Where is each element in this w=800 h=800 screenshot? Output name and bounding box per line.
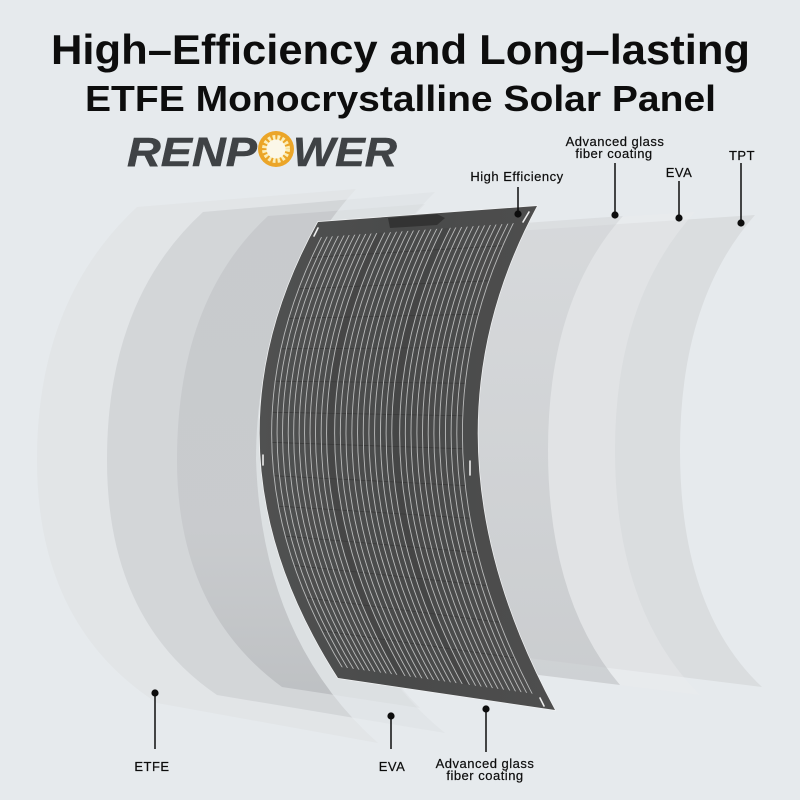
callout: TPT: TPT bbox=[729, 148, 755, 163]
left layer: ETFE bbox=[37, 189, 378, 743]
callout: Advanced glass fiber coating (top): fiber coating bbox=[575, 146, 653, 161]
right layer: advanced glass fiber coating bbox=[440, 216, 623, 685]
callout: Advanced glass fiber coating (bottom): fiber coating bbox=[446, 768, 524, 783]
right layer: EVA bbox=[440, 212, 700, 695]
right layer: TPT bbox=[440, 215, 762, 687]
left layer: EVA bbox=[107, 200, 352, 718]
logo: RENPOWER: WER bbox=[293, 129, 397, 175]
solar panel bbox=[260, 206, 555, 710]
busbar lines bbox=[272, 207, 540, 708]
title: High–Efficiency and Long–lasting bbox=[51, 26, 750, 73]
callout: Advanced glass fiber coating (bottom) bbox=[436, 705, 534, 783]
callout: High Efficiency bbox=[470, 169, 564, 218]
cell gaps bbox=[331, 212, 473, 698]
callout: EVA (top) bbox=[666, 165, 692, 222]
callout: Advanced glass fiber coating (top): Advanced glass bbox=[566, 134, 664, 149]
callout: ETFE bbox=[134, 689, 170, 774]
callout: EVA (bottom) bbox=[379, 712, 405, 774]
callout: Advanced glass fiber coating (top) bbox=[566, 134, 664, 219]
callout: High Efficiency: High Efficiency bbox=[470, 169, 564, 184]
logo: RENPOWER: RENP bbox=[127, 129, 258, 175]
callout: ETFE: ETFE bbox=[134, 759, 170, 774]
logo: RENPOWER bbox=[127, 129, 397, 175]
left layer: advanced glass fiber coating bbox=[188, 546, 332, 694]
callout: EVA (bottom): EVA bbox=[379, 759, 405, 774]
title: ETFE Monocrystalline Solar Panel bbox=[85, 78, 716, 119]
callout: Advanced glass fiber coating (bottom): Advanced glass bbox=[436, 756, 534, 771]
junction box bbox=[388, 214, 445, 228]
mounting slots bbox=[263, 212, 544, 706]
cell grid rows bbox=[272, 246, 514, 658]
title bbox=[51, 26, 750, 119]
callout: TPT bbox=[729, 148, 755, 227]
left layer: faint front sheets bbox=[107, 192, 445, 733]
callout: EVA (top): EVA bbox=[666, 165, 692, 180]
